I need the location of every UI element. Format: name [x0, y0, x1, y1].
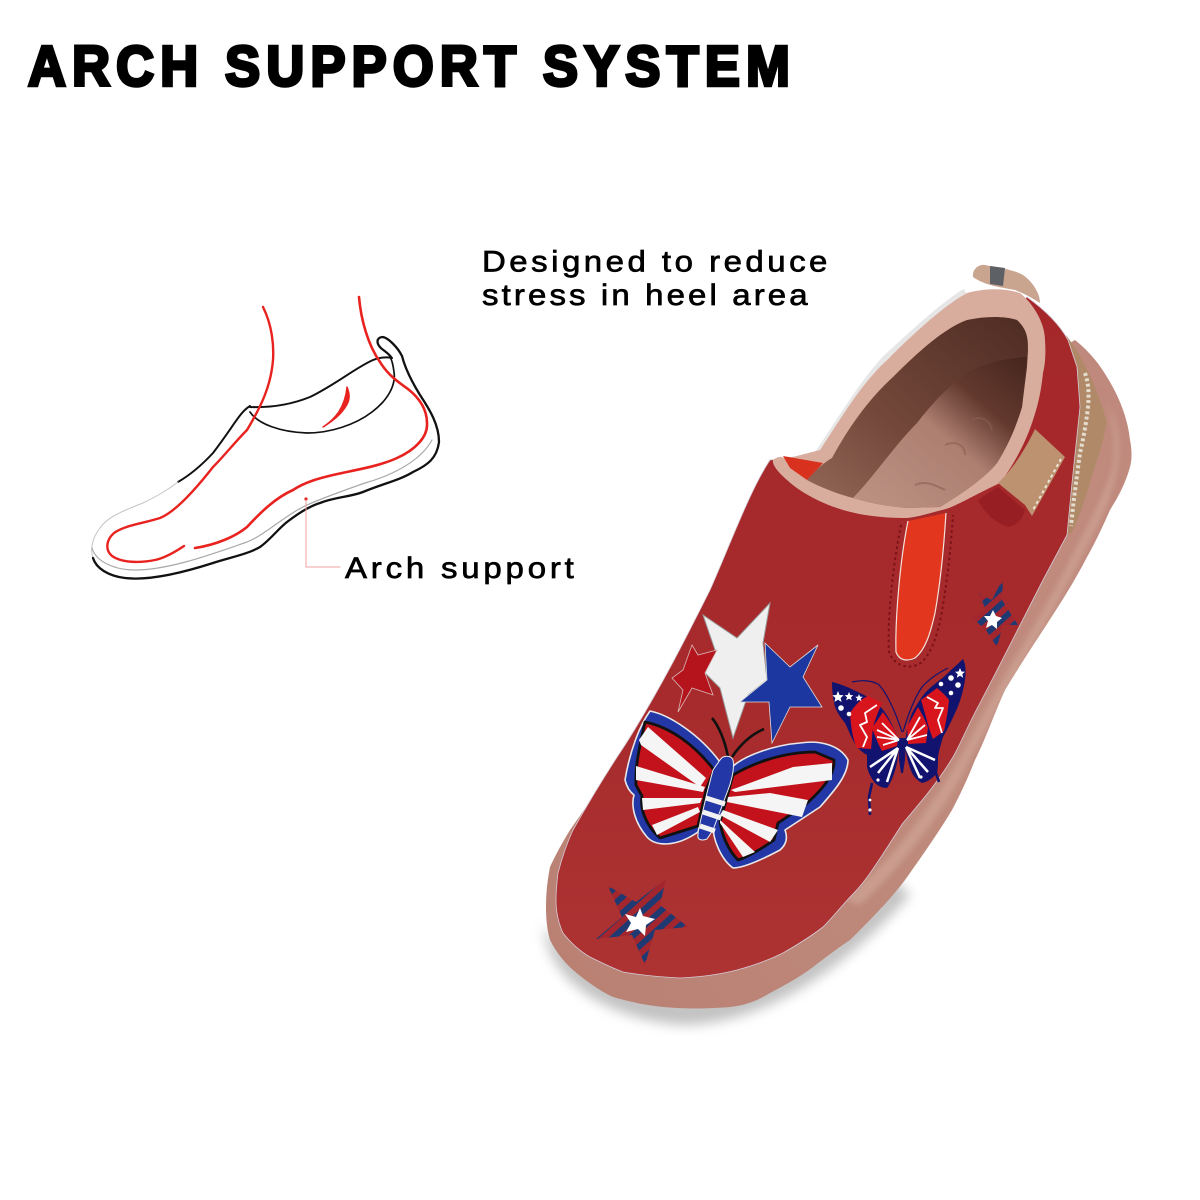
text block: heel callout: Designed to reduce [482, 244, 827, 278]
arch support marker and leader [304, 497, 340, 567]
sketch: red ankle crescent [323, 387, 349, 427]
antennae [712, 718, 764, 757]
butterfly: small patriotic [832, 659, 966, 815]
white stripes [636, 727, 832, 857]
orange elastic gusset [889, 513, 953, 667]
sketch: black shoe outline [92, 337, 439, 579]
antennae [852, 668, 948, 732]
collar lining [773, 289, 1045, 518]
sketch: grey midsole line [92, 440, 432, 570]
wing body [899, 738, 906, 773]
right wings [713, 742, 848, 868]
text block: heel callout [482, 244, 827, 312]
collar outer pale edge [818, 291, 965, 452]
body stripes [700, 798, 725, 831]
outsole [546, 340, 1132, 1008]
photo: red slip-on shoe [544, 265, 1132, 1025]
wings red [850, 688, 949, 751]
text block: heel callout: stress in heel area [482, 277, 808, 312]
body [698, 756, 733, 840]
outsole highlight [845, 387, 1119, 905]
sketch: red foot line front [107, 307, 273, 562]
heel tan panel [1066, 335, 1107, 536]
insole [853, 357, 1027, 508]
wing white details [860, 697, 943, 747]
shoe shadow [544, 880, 910, 1025]
insole bumps [915, 418, 992, 490]
collar gusset left [783, 456, 823, 480]
left wings [625, 711, 720, 844]
wing stars [832, 668, 965, 812]
title: ARCH SUPPORT SYSTEM [28, 33, 790, 98]
tan side tab [998, 429, 1065, 516]
wings navy [832, 659, 966, 788]
shoe upper [556, 297, 1080, 978]
star: white [703, 603, 770, 738]
shoe interior wall [807, 317, 1028, 508]
star: red [672, 645, 717, 712]
tail [869, 773, 939, 815]
butterfly: large striped [625, 711, 848, 868]
dark stitched patch [978, 487, 1025, 527]
shoe sketch diagram [92, 297, 439, 579]
star: striped near toe [596, 879, 688, 965]
lower wing rays [870, 747, 935, 782]
heel tan stitching [1071, 373, 1089, 526]
star: striped near heel [972, 578, 1018, 647]
text: arch support label: Arch support [345, 550, 574, 585]
heel pull tab [973, 265, 1040, 303]
sketch: red foot line rear [195, 297, 427, 548]
star: blue [740, 643, 822, 743]
